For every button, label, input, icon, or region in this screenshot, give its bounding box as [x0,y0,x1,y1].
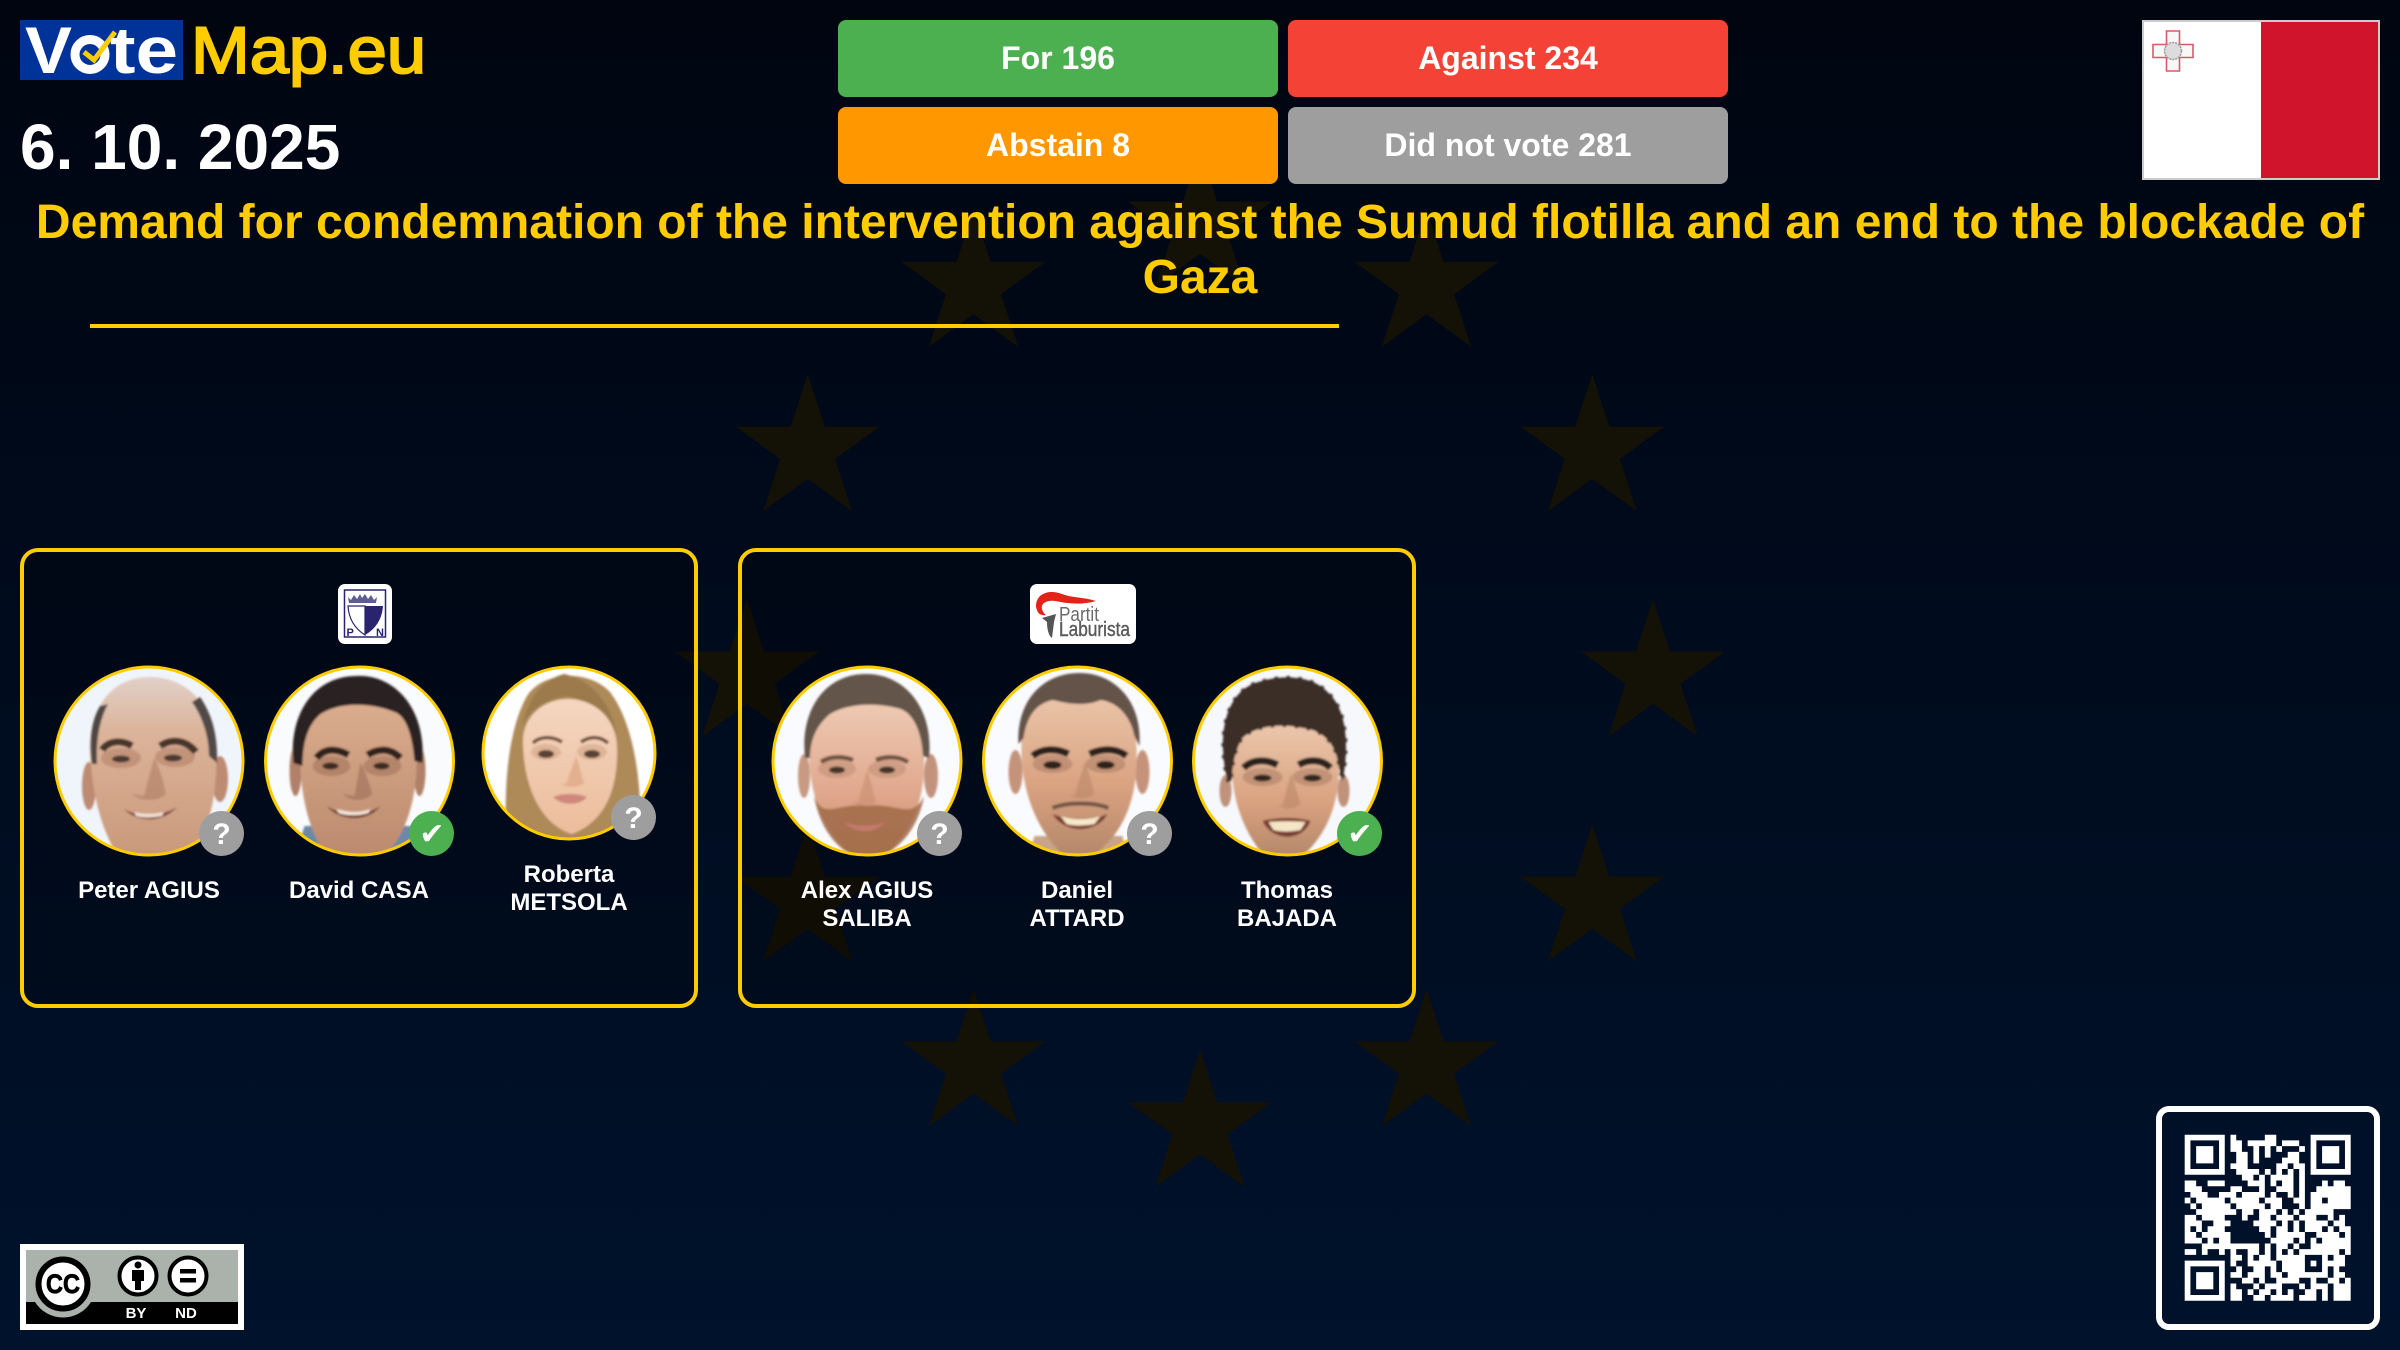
logo: VoteMap.eu: V [25,13,72,87]
member: Thomas BAJADA [1194,667,1382,932]
party logo: PN: P [346,627,354,639]
name: SALIBA [822,905,912,932]
portrait [984,667,1172,858]
portrait [266,667,454,858]
vote badge: unknown [1127,811,1172,856]
button: for [838,20,1278,97]
portrait [1194,667,1382,856]
name: Peter AGIUS [78,877,220,904]
portrait [55,667,243,858]
licence badge: CC BY-ND: BY [126,1305,146,1322]
vote badge: for [409,811,454,856]
vote badge: for: ✔ [419,817,445,852]
name: Roberta [524,861,615,888]
name: Alex AGIUS [801,877,933,904]
portrait [773,667,961,858]
licence badge: CC BY-ND: ND [175,1305,197,1322]
vote badge: unknown [611,795,656,840]
vote badge: unknown: ? [212,818,231,851]
button: abstain [838,107,1278,184]
date: 6. 10. 2025 [20,111,340,183]
name: METSOLA [510,889,628,916]
QR code [2159,1109,2377,1327]
icon: ND equals [170,1258,206,1294]
flag: Malta [2143,21,2379,179]
panel: Partit Nazzjonalista [22,550,696,1006]
button: did not vote: Did not vote 281 [1384,127,1632,163]
logo: VoteMap.eu [20,13,426,87]
member: Daniel ATTARD [984,667,1172,932]
button: against [1288,20,1728,97]
member: Roberta METSOLA [483,667,656,916]
EU star circle [675,149,1725,1187]
vote badge: for [1337,811,1382,856]
member: Alex AGIUS SALIBA [773,667,962,932]
title underline [90,324,1339,328]
name: Daniel [1041,877,1113,904]
licence badge: CC BY-ND [20,1244,244,1330]
name: David CASA [289,877,429,904]
button: for: For 196 [1001,40,1115,76]
name: ATTARD [1029,905,1125,932]
vote badge: unknown: ? [1140,818,1159,851]
vote badge: unknown: ? [624,802,643,835]
name: Thomas [1241,877,1333,904]
party logo: PN: N [376,627,384,639]
party logo: PN [338,584,392,644]
title [36,196,2365,304]
icon: CC [38,1260,88,1308]
button: abstain: Abstain 8 [986,127,1130,163]
name: BAJADA [1237,905,1337,932]
title: Gaza [1143,251,1258,304]
vote badge: unknown: ? [930,818,949,851]
title: Demand for condemnation of the intervention against the Sumud flotilla and an end to the blockade of [36,196,2365,249]
member: Peter AGIUS [55,667,244,904]
vote badge: for: ✔ [1347,817,1373,852]
vote badge: unknown [199,811,244,856]
vote badge: unknown [917,811,962,856]
portrait [483,667,655,842]
logo: VoteMap.eu: te [110,13,178,87]
button: did not vote [1288,107,1728,184]
logo: VoteMap.eu: Map.eu [191,13,426,87]
icon: BY person [120,1258,156,1294]
member: David CASA [266,667,454,904]
panel: Partit Laburista [740,550,1414,1006]
party logo: Partit Laburista: Laburista [1059,619,1131,641]
party logo: Partit Laburista: Partit [1059,604,1099,626]
party logo: Partit Laburista [1030,584,1136,644]
vote tally buttons [838,20,1728,184]
button: against: Against 234 [1418,40,1598,76]
icon: CC: CC [46,1269,80,1299]
